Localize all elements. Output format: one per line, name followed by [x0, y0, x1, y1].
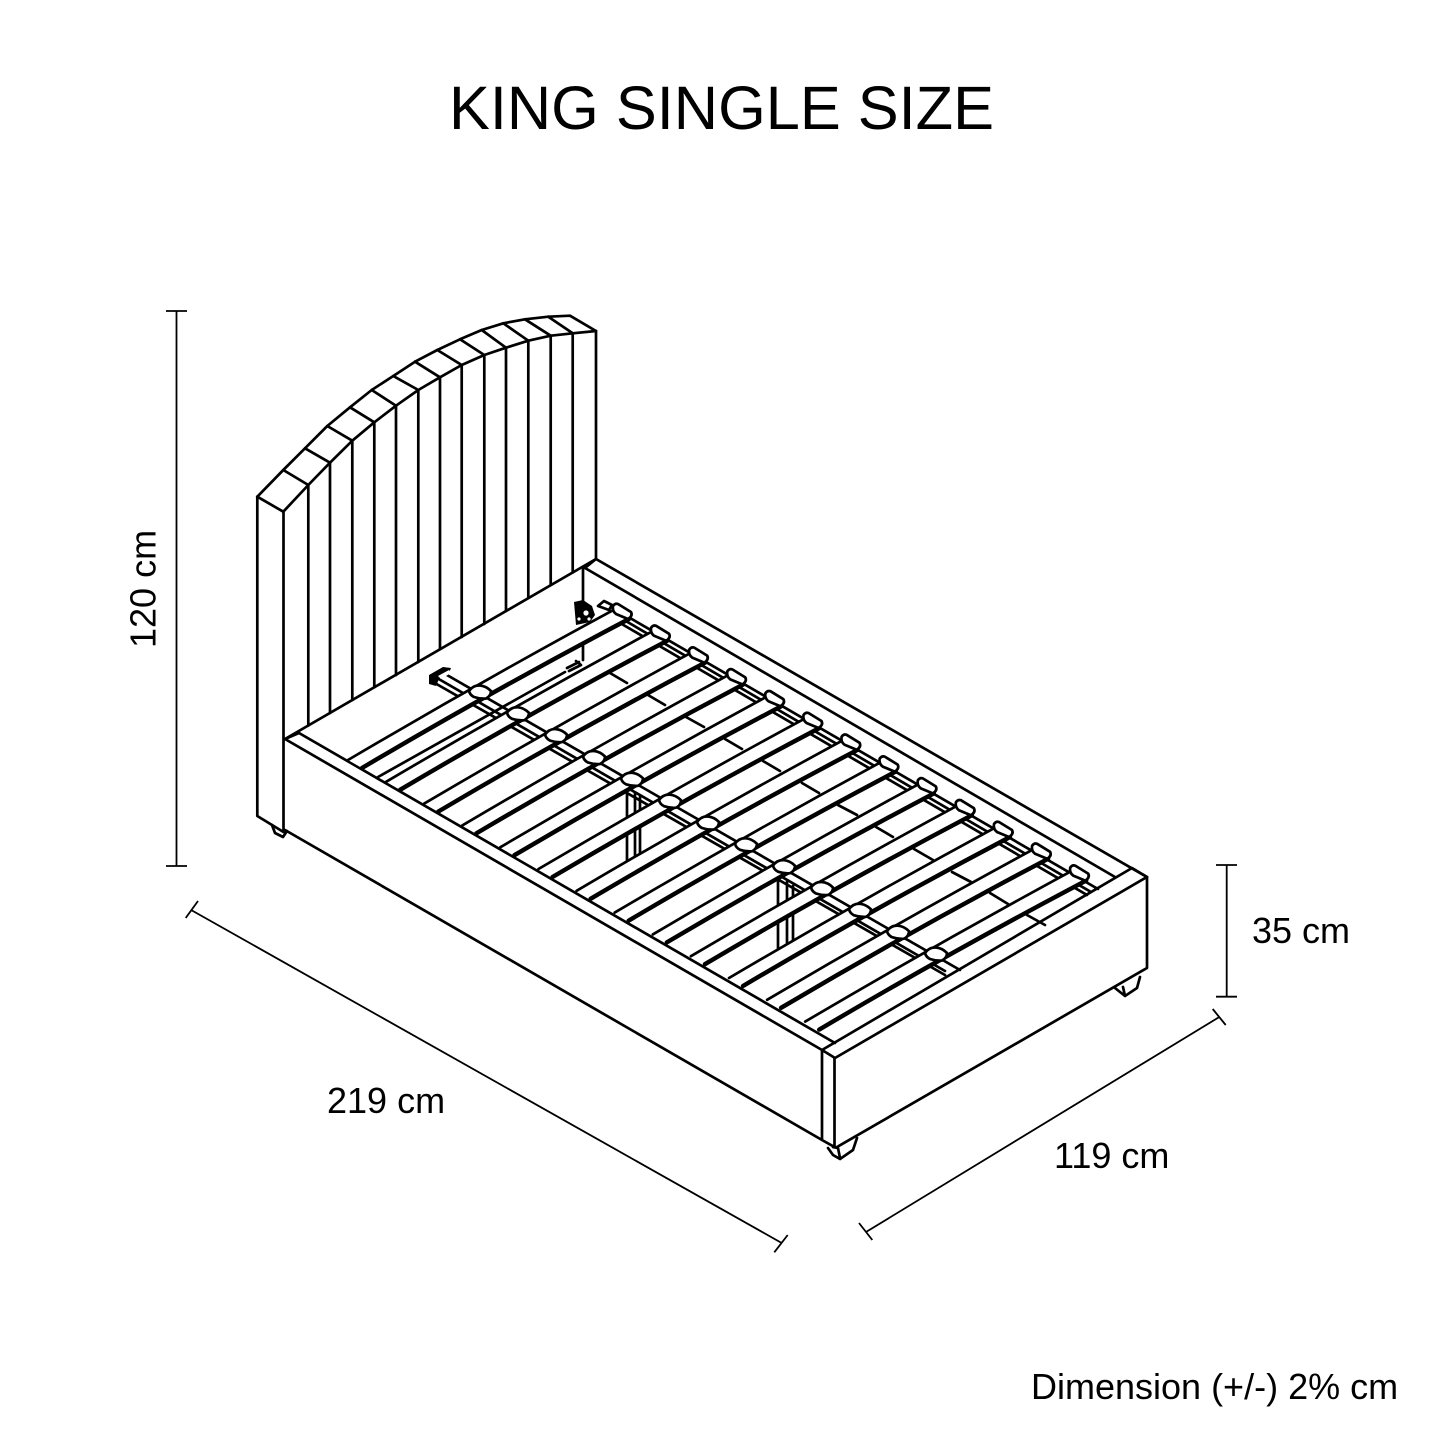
dimension: height 120 cm: 120 cm [122, 530, 164, 648]
dimension: width 119 cm [859, 1009, 1226, 1240]
dimension: length 219 cm: 219 cm [327, 1080, 445, 1121]
headboard [257, 316, 596, 832]
tolerance note: Dimension (+/-) 2% cm [1031, 1366, 1398, 1407]
dimension: width 119 cm: 119 cm [1054, 1135, 1169, 1176]
bed feet [272, 825, 1140, 1159]
under-slat supports [378, 568, 1045, 948]
bed illustration [257, 316, 1147, 1159]
dimension: leg height 35 cm [1216, 865, 1350, 997]
title: KING SINGLE SIZE [449, 74, 994, 142]
bed frame [285, 559, 1147, 1147]
dimension: leg height 35 cm: 35 cm [1252, 910, 1350, 951]
hinge bracket [574, 600, 595, 625]
slats [348, 604, 1089, 1030]
side slat rail [598, 601, 1098, 895]
dimension: length 219 cm [186, 901, 788, 1252]
dimension: height 120 cm [122, 311, 187, 866]
center rail [429, 667, 960, 975]
slat pads [469, 685, 947, 961]
